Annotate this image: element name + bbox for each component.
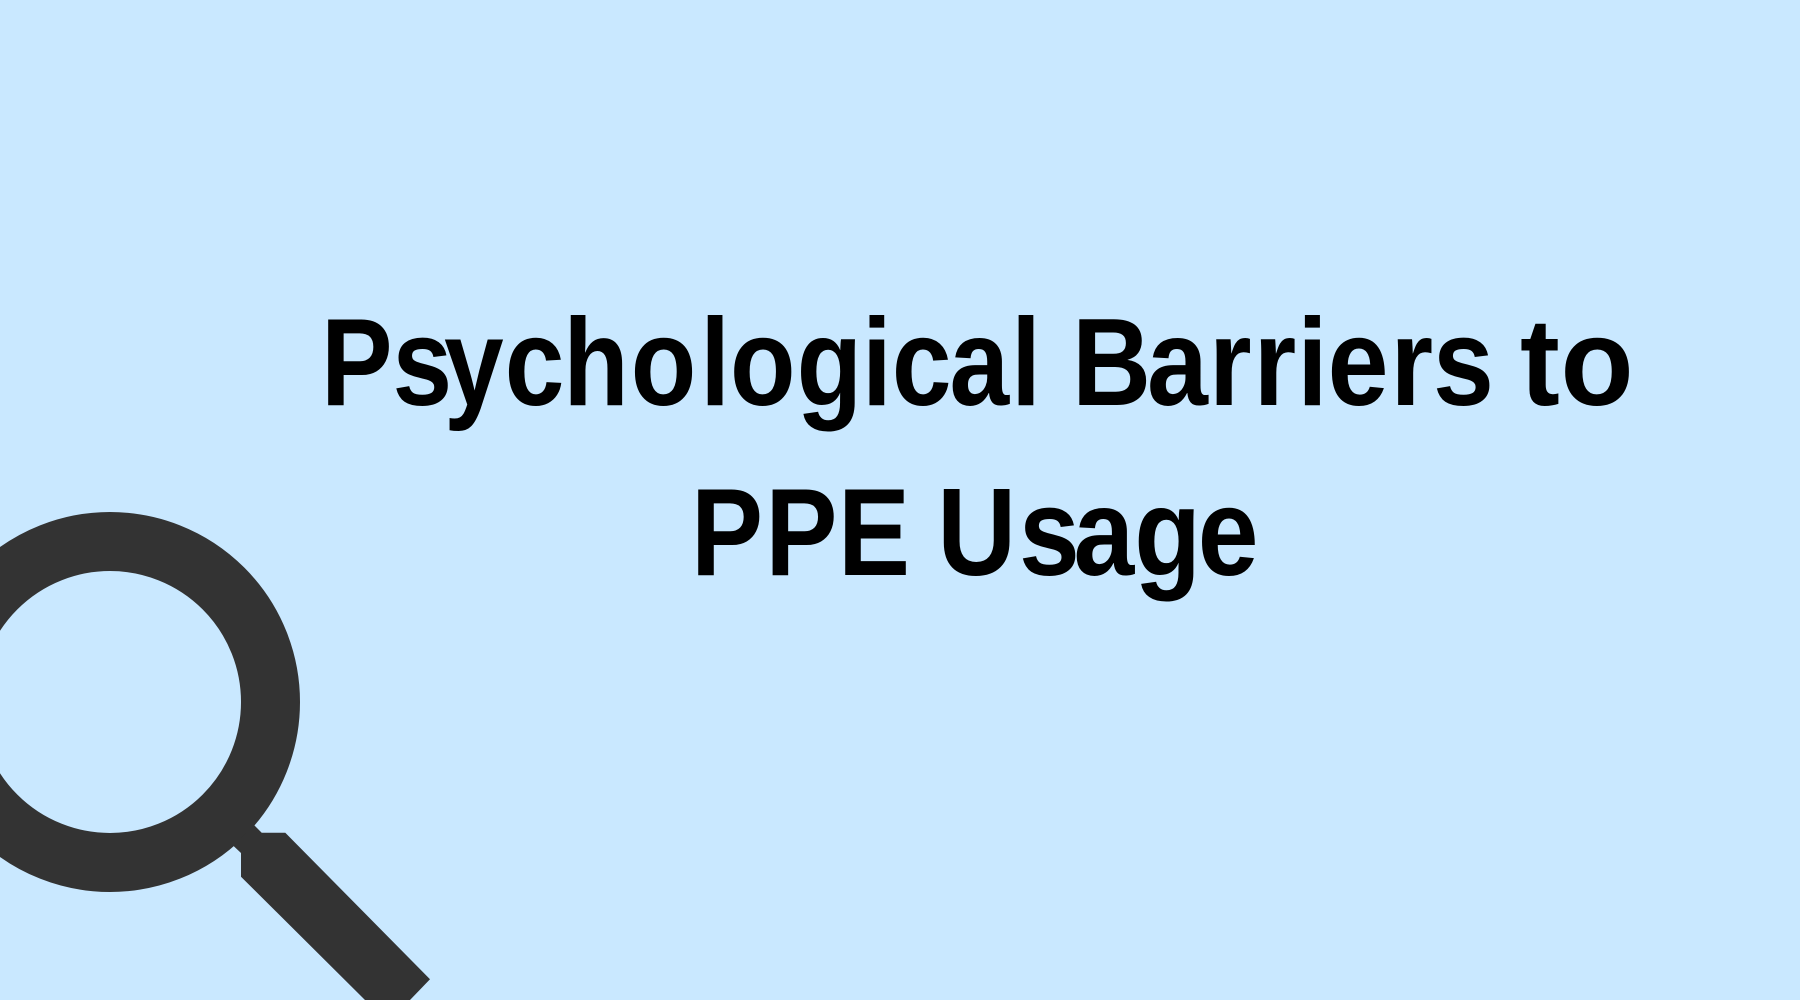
title: PPE <box>691 463 910 602</box>
title <box>321 293 1634 602</box>
title: to <box>1520 293 1634 431</box>
title: Psychological <box>321 293 1041 432</box>
title: Usage <box>937 463 1258 602</box>
title: Barriers <box>1072 293 1494 432</box>
icon: magnifying glass <box>0 542 430 1000</box>
